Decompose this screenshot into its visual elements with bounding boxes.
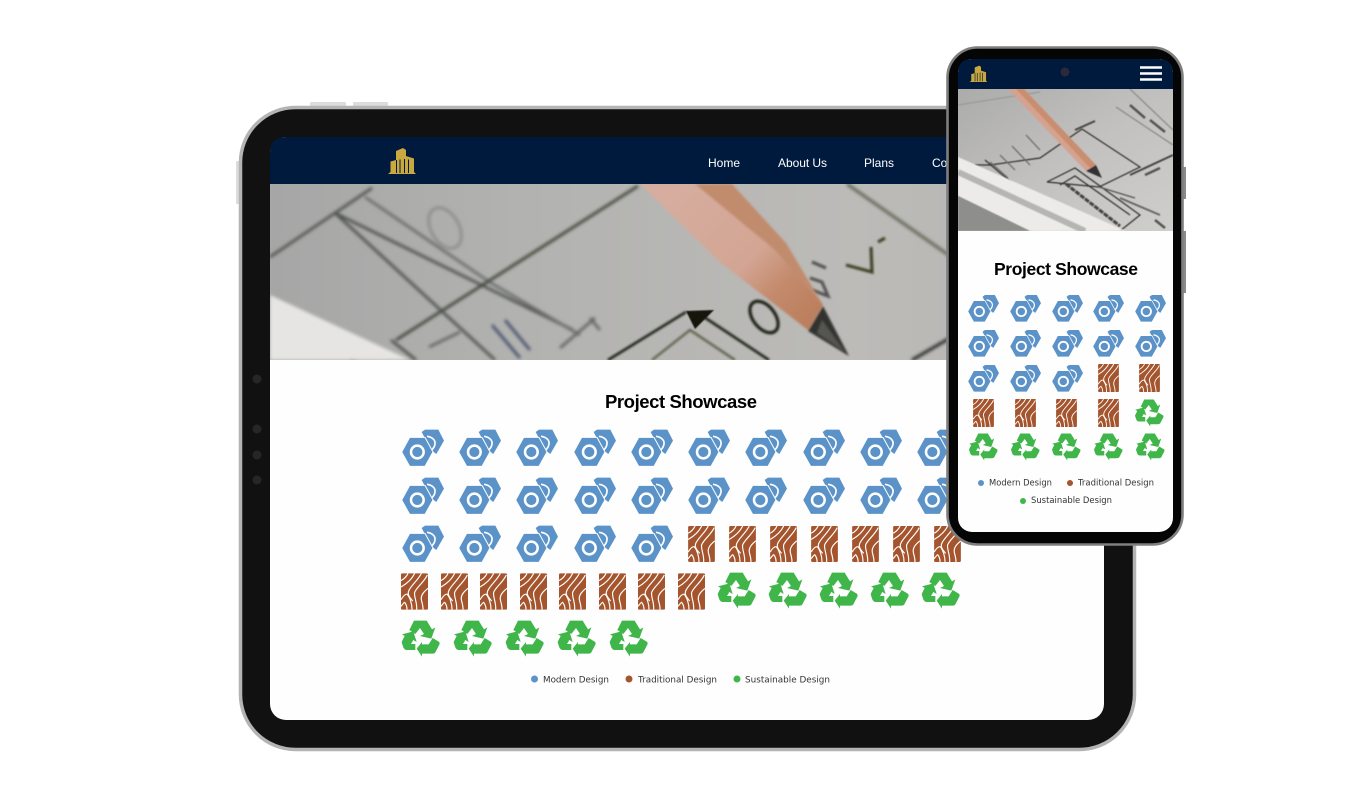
- tablet row 5: sustainable icons: [402, 621, 648, 657]
- phone row 3: modern and traditional icons: [968, 364, 1160, 392]
- tablet screen: [270, 137, 1104, 720]
- phone legend: Modern Design: [989, 478, 1052, 488]
- tablet nav links: Plans: [864, 156, 894, 170]
- tablet sensors: [252, 374, 262, 484]
- tablet logo: [388, 148, 416, 174]
- phone screen: [958, 59, 1173, 532]
- phone side buttons: [1182, 167, 1186, 293]
- tablet row 3: modern and traditional icons: [402, 526, 961, 562]
- phone frame: [948, 48, 1182, 544]
- tablet row 1: modern design icons: [402, 430, 959, 466]
- phone row 2: modern design icons: [968, 330, 1166, 357]
- tablet title: Project Showcase: [605, 391, 757, 412]
- phone logo: [970, 66, 987, 82]
- tablet frame: [240, 108, 1134, 750]
- phone camera: [1060, 68, 1070, 76]
- tablet row 4: traditional and sustainable icons: [401, 573, 960, 610]
- tablet navigation bar: [270, 137, 1104, 184]
- tablet legend: Modern Design: [543, 676, 609, 686]
- phone menu icon: [1140, 68, 1162, 80]
- phone legend: Traditional Design: [1077, 478, 1154, 488]
- phone row 5: sustainable icons: [969, 434, 1164, 460]
- phone row 1: modern design icons: [968, 295, 1166, 322]
- phone device: [948, 48, 1186, 544]
- tablet nav links: [708, 156, 974, 170]
- pencil: [1008, 89, 1102, 178]
- phone navigation bar: [958, 59, 1173, 89]
- tablet legend: [531, 676, 830, 686]
- phone hero photo: pencil on blueprint: [958, 89, 1173, 231]
- tablet nav links: Home: [708, 156, 740, 170]
- tablet device: [236, 102, 1134, 750]
- tablet legend: Sustainable Design: [745, 676, 830, 686]
- phone row 4: traditional and sustainable icons: [973, 399, 1164, 427]
- phone title: Project Showcase: [994, 259, 1138, 279]
- phone legend: Sustainable Design: [1031, 496, 1112, 506]
- ruler corner: [270, 295, 410, 360]
- phone legend: [978, 478, 1154, 506]
- tablet row 2: modern design icons: [402, 478, 959, 514]
- ruler: [958, 157, 1126, 231]
- tablet side buttons: [236, 102, 388, 204]
- blueprint arrowhead: [686, 310, 714, 329]
- tablet legend: Traditional Design: [637, 676, 717, 686]
- tablet hero photo: pencil on blueprint: [270, 184, 946, 360]
- tablet nav links: About Us: [778, 156, 827, 170]
- phone pictogram chart: [968, 295, 1166, 460]
- tablet pictogram chart: [401, 430, 961, 657]
- tablet nav links: Contact: [932, 156, 974, 170]
- pencil: [640, 184, 849, 356]
